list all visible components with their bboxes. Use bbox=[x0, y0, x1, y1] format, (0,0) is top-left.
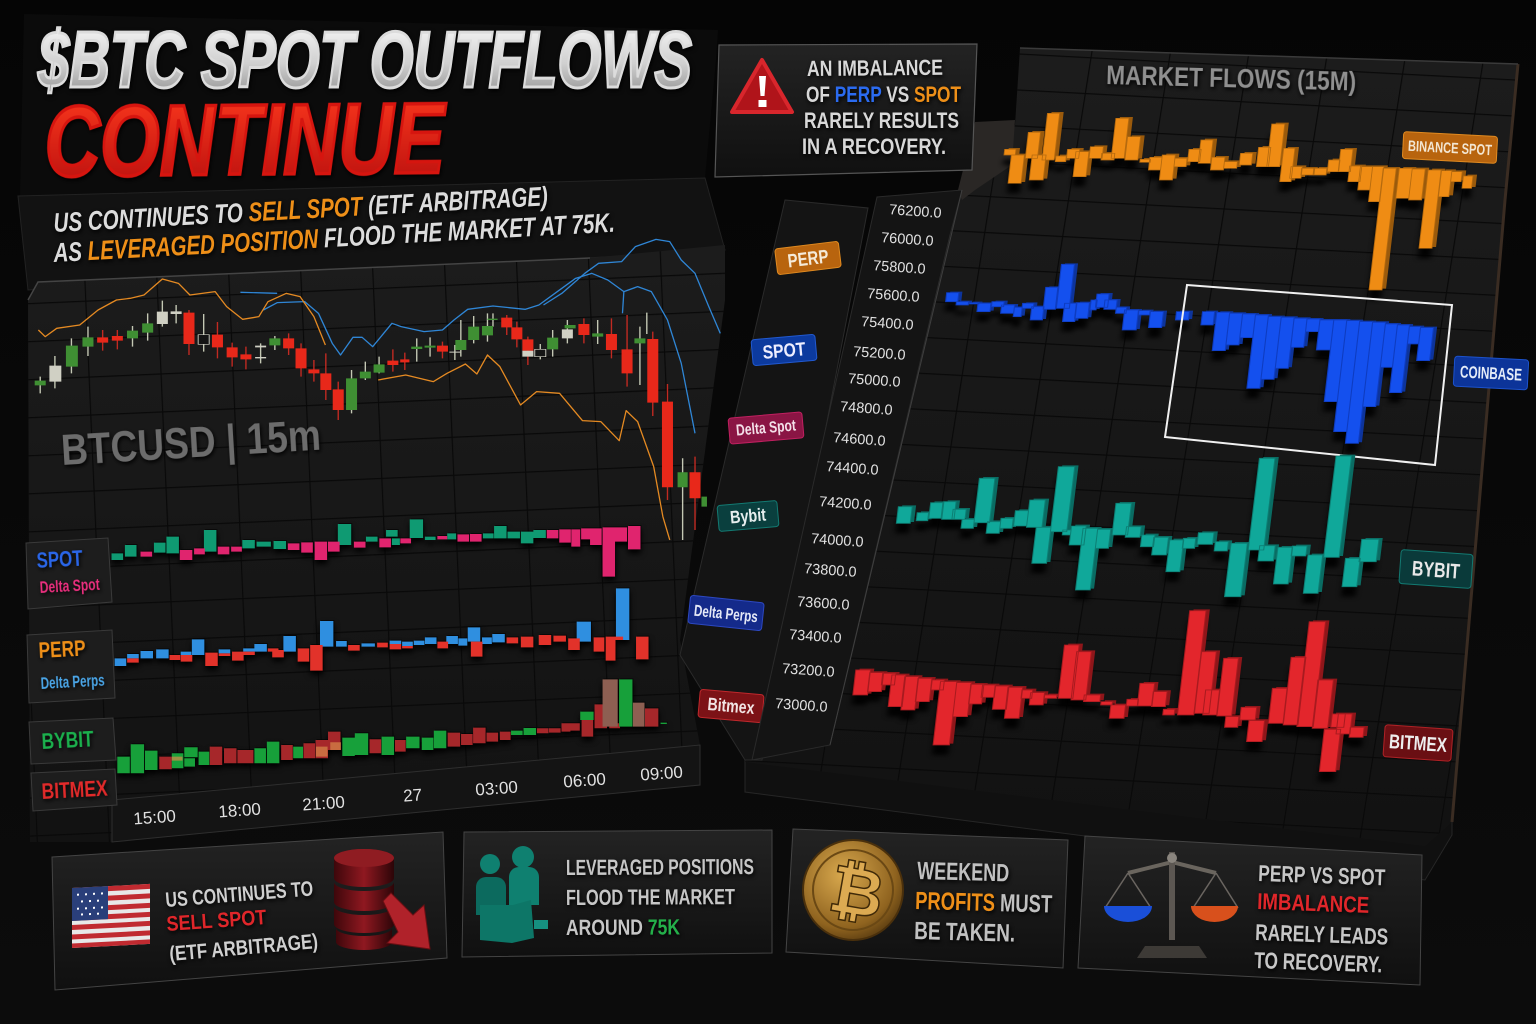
pill: Bybit: Bybit bbox=[729, 504, 767, 528]
y-axis price scale: 73200.0 bbox=[782, 661, 835, 681]
chart: bitmex flows bbox=[843, 609, 1382, 782]
card text: PROFITS MUST bbox=[915, 887, 1053, 919]
y-axis price scale: 75800.0 bbox=[873, 258, 926, 278]
pill: PERP bbox=[775, 241, 841, 275]
icon: US flag bbox=[72, 884, 150, 948]
spot volume bars bbox=[112, 519, 640, 577]
chart: binance spot flows bbox=[987, 112, 1484, 300]
tag: binance spot: BINANCE SPOT bbox=[1408, 138, 1492, 159]
icon: warning triangle bbox=[732, 60, 792, 112]
time axis labels: 15:00 bbox=[133, 807, 177, 828]
tag: coinbase bbox=[1453, 356, 1529, 390]
title bbox=[37, 15, 692, 198]
card: leveraged positions bbox=[462, 830, 772, 957]
heading: market flows: MARKET FLOWS (15M) bbox=[1106, 60, 1357, 97]
card text: FLOOD THE MARKET bbox=[566, 884, 735, 910]
icon: falling database stack bbox=[334, 849, 430, 950]
card: perp vs spot imbalance bbox=[1078, 836, 1422, 985]
card text: IMBALANCE bbox=[1257, 888, 1370, 918]
panel: subtitle headline bbox=[18, 178, 725, 290]
y-axis price scale: 75000.0 bbox=[848, 371, 901, 391]
tag: bybit bbox=[1399, 550, 1473, 588]
card text: US CONTINUES TO bbox=[165, 877, 314, 912]
y-axis price scale: 74000.0 bbox=[811, 531, 864, 551]
time axis labels: 06:00 bbox=[563, 770, 607, 791]
panel: BTCUSD price chart bbox=[28, 239, 725, 842]
y-axis price scale: 73000.0 bbox=[775, 696, 828, 716]
icon: balance scale bbox=[1104, 852, 1238, 958]
y-axis price scale: 74200.0 bbox=[819, 494, 872, 514]
chart: bybit flows bbox=[886, 455, 1393, 607]
subtitle text bbox=[52, 181, 616, 268]
legend: left exchange labels: PERP bbox=[38, 636, 86, 663]
y-axis price scale: 76000.0 bbox=[881, 230, 934, 250]
tag: bybit: BYBIT bbox=[1411, 557, 1461, 584]
y-axis price scale: 74400.0 bbox=[826, 459, 879, 479]
title backing plate bbox=[20, 14, 718, 196]
pill: Bitmex bbox=[698, 689, 764, 723]
callout text bbox=[802, 55, 961, 159]
legend: left exchange labels: BITMEX bbox=[41, 776, 108, 804]
y-axis price scale: 75400.0 bbox=[861, 314, 914, 334]
highlight rectangle bbox=[1165, 285, 1452, 465]
card text: LEVERAGED POSITIONS bbox=[566, 854, 754, 880]
y-axis price scale: 76200.0 bbox=[889, 202, 942, 222]
chart: coinbase flows bbox=[928, 263, 1445, 453]
callout text: AN IMBALANCE bbox=[807, 55, 943, 81]
card text bbox=[914, 857, 1053, 948]
legend: left exchange labels bbox=[26, 538, 117, 811]
legend: left exchange labels: BYBIT bbox=[41, 726, 95, 754]
callout text: RARELY RESULTS bbox=[804, 108, 959, 133]
subtitle text: US CONTINUES TO SELL SPOT (ETF ARBITRAGE) bbox=[53, 181, 549, 238]
time axis labels: 21:00 bbox=[302, 793, 346, 814]
blue and orange indicator lines bbox=[38, 239, 720, 540]
legend: left exchange labels: Delta Perps bbox=[40, 671, 105, 693]
legend: left exchange labels: Delta Spot bbox=[39, 575, 100, 597]
y-axis price scale: 73800.0 bbox=[804, 561, 857, 581]
card text: AROUND 75K bbox=[566, 914, 680, 940]
title: $BTC SPOT OUTFLOWS bbox=[37, 15, 692, 104]
title: CONTINUE bbox=[44, 82, 448, 198]
card text: SELL SPOT bbox=[166, 906, 267, 936]
y-axis price scale: 73600.0 bbox=[797, 594, 850, 614]
perp volume bars bbox=[115, 588, 649, 671]
pill: Bybit bbox=[717, 500, 779, 532]
card text: (ETF ARBITRAGE) bbox=[168, 930, 319, 966]
subtitle text: AS LEVERAGED POSITION FLOOD THE MARKET AT 75K. bbox=[52, 208, 616, 268]
time axis strip bbox=[112, 745, 700, 842]
y-axis price scale: 75200.0 bbox=[853, 344, 906, 364]
pill: Delta Spot bbox=[728, 412, 804, 444]
y-axis price scale: 75600.0 bbox=[867, 286, 920, 306]
tag: bitmex: BITMEX bbox=[1388, 731, 1448, 757]
card: US sell spot bbox=[52, 832, 447, 990]
pill: Delta Spot: Delta Spot bbox=[735, 417, 797, 440]
card text bbox=[1254, 860, 1389, 977]
card text bbox=[566, 854, 754, 940]
callout text: OF PERP VS SPOT bbox=[806, 82, 961, 107]
card: weekend profits bbox=[786, 829, 1068, 968]
y-axis price scale: 73400.0 bbox=[789, 627, 842, 647]
y-axis price scale: 74600.0 bbox=[833, 430, 886, 450]
card text: BE TAKEN. bbox=[914, 917, 1016, 948]
pill: PERP: PERP bbox=[787, 247, 830, 272]
time axis labels: 27 bbox=[403, 785, 423, 806]
time axis labels: 03:00 bbox=[475, 778, 519, 799]
time axis labels bbox=[133, 763, 684, 828]
time axis labels: 09:00 bbox=[640, 763, 684, 784]
panel: market flows board bbox=[745, 48, 1518, 880]
bybit and bitmex volume bars bbox=[117, 679, 667, 773]
pill: Delta Perps: Delta Perps bbox=[693, 603, 759, 626]
time axis labels: 18:00 bbox=[218, 800, 262, 821]
y-axis price scale bbox=[752, 190, 962, 760]
tag: bitmex bbox=[1383, 725, 1453, 761]
callout: imbalance warning bbox=[715, 44, 977, 177]
card text bbox=[165, 877, 319, 966]
card text: PERP VS SPOT bbox=[1258, 860, 1386, 890]
pill: SPOT: SPOT bbox=[762, 339, 807, 364]
BTCUSD 15m watermark: BTCUSD | 15m bbox=[60, 411, 322, 476]
pill: Bitmex: Bitmex bbox=[707, 694, 755, 718]
y-axis price scale: 74800.0 bbox=[840, 399, 893, 419]
pill: SPOT bbox=[751, 334, 817, 366]
icon: teal traders bbox=[476, 846, 548, 943]
callout text: IN A RECOVERY. bbox=[802, 134, 946, 159]
pill: Delta Perps bbox=[688, 595, 764, 631]
candlestick chart bbox=[35, 301, 707, 540]
card text: RARELY LEADS bbox=[1255, 919, 1389, 950]
icon: bitcoin coin bbox=[803, 840, 903, 940]
panel: exchange column bbox=[680, 200, 868, 760]
icon: bitcoin coin: ₿ bbox=[824, 849, 890, 934]
tag: binance spot bbox=[1402, 132, 1498, 163]
card text: WEEKEND bbox=[917, 857, 1010, 887]
legend: left exchange labels: SPOT bbox=[36, 546, 84, 573]
card text: TO RECOVERY. bbox=[1254, 947, 1383, 977]
